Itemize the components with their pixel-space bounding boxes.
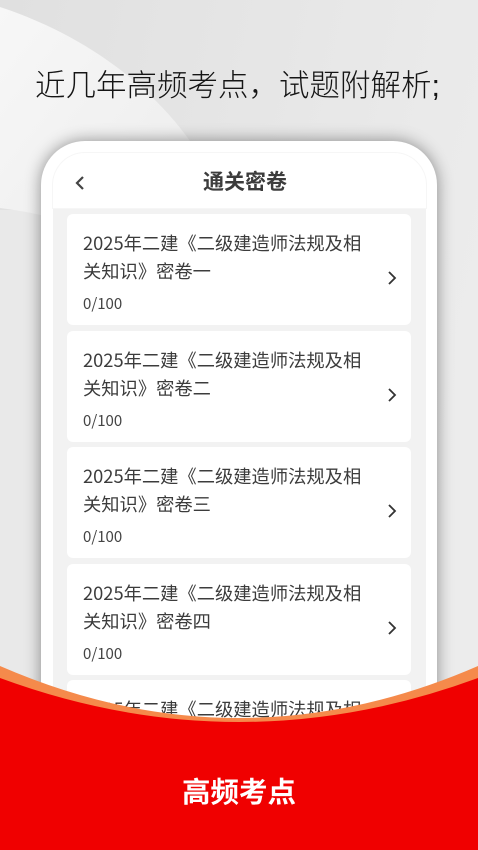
- card: paper 5: [67, 680, 411, 791]
- footer label: 高频考点: [182, 777, 296, 809]
- card: paper 2: 2025年二建《二级建造师法规及相: [83, 347, 361, 373]
- card: paper 4: 0/100: [83, 643, 122, 664]
- card: paper 1: [67, 214, 411, 325]
- panel: phone screen: [53, 153, 426, 850]
- card: paper 1: 2025年二建《二级建造师法规及相: [83, 230, 361, 256]
- screen heading: 通关密卷: [203, 171, 287, 194]
- title: 近几年高频考点，试题附解析;: [35, 69, 440, 103]
- card: paper 2: [67, 331, 411, 442]
- card: paper 5: 2025年二建《二级建造师法规及相: [83, 696, 361, 722]
- card: paper 3: 0/100: [83, 526, 122, 547]
- card: paper 1: 关知识》密卷一: [83, 258, 211, 284]
- panel: screen header: [53, 153, 426, 208]
- card: paper 3: 2025年二建《二级建造师法规及相: [83, 463, 361, 489]
- card: paper 3: 关知识》密卷三: [83, 491, 211, 517]
- red footer curve: [0, 666, 478, 850]
- card: paper 3: [67, 447, 411, 558]
- card: paper 4: 2025年二建《二级建造师法规及相: [83, 580, 361, 606]
- card: paper 1: 0/100: [83, 293, 122, 314]
- card: paper 5: 关知识》密卷五: [83, 724, 211, 750]
- icon: back arrow: [76, 176, 84, 190]
- card: paper 4: 关知识》密卷四: [83, 608, 211, 634]
- panel: phone mockup: [41, 141, 437, 850]
- card: paper 2: 0/100: [83, 410, 122, 431]
- card: paper 4: [67, 564, 411, 675]
- card: paper 2: 关知识》密卷二: [83, 375, 211, 401]
